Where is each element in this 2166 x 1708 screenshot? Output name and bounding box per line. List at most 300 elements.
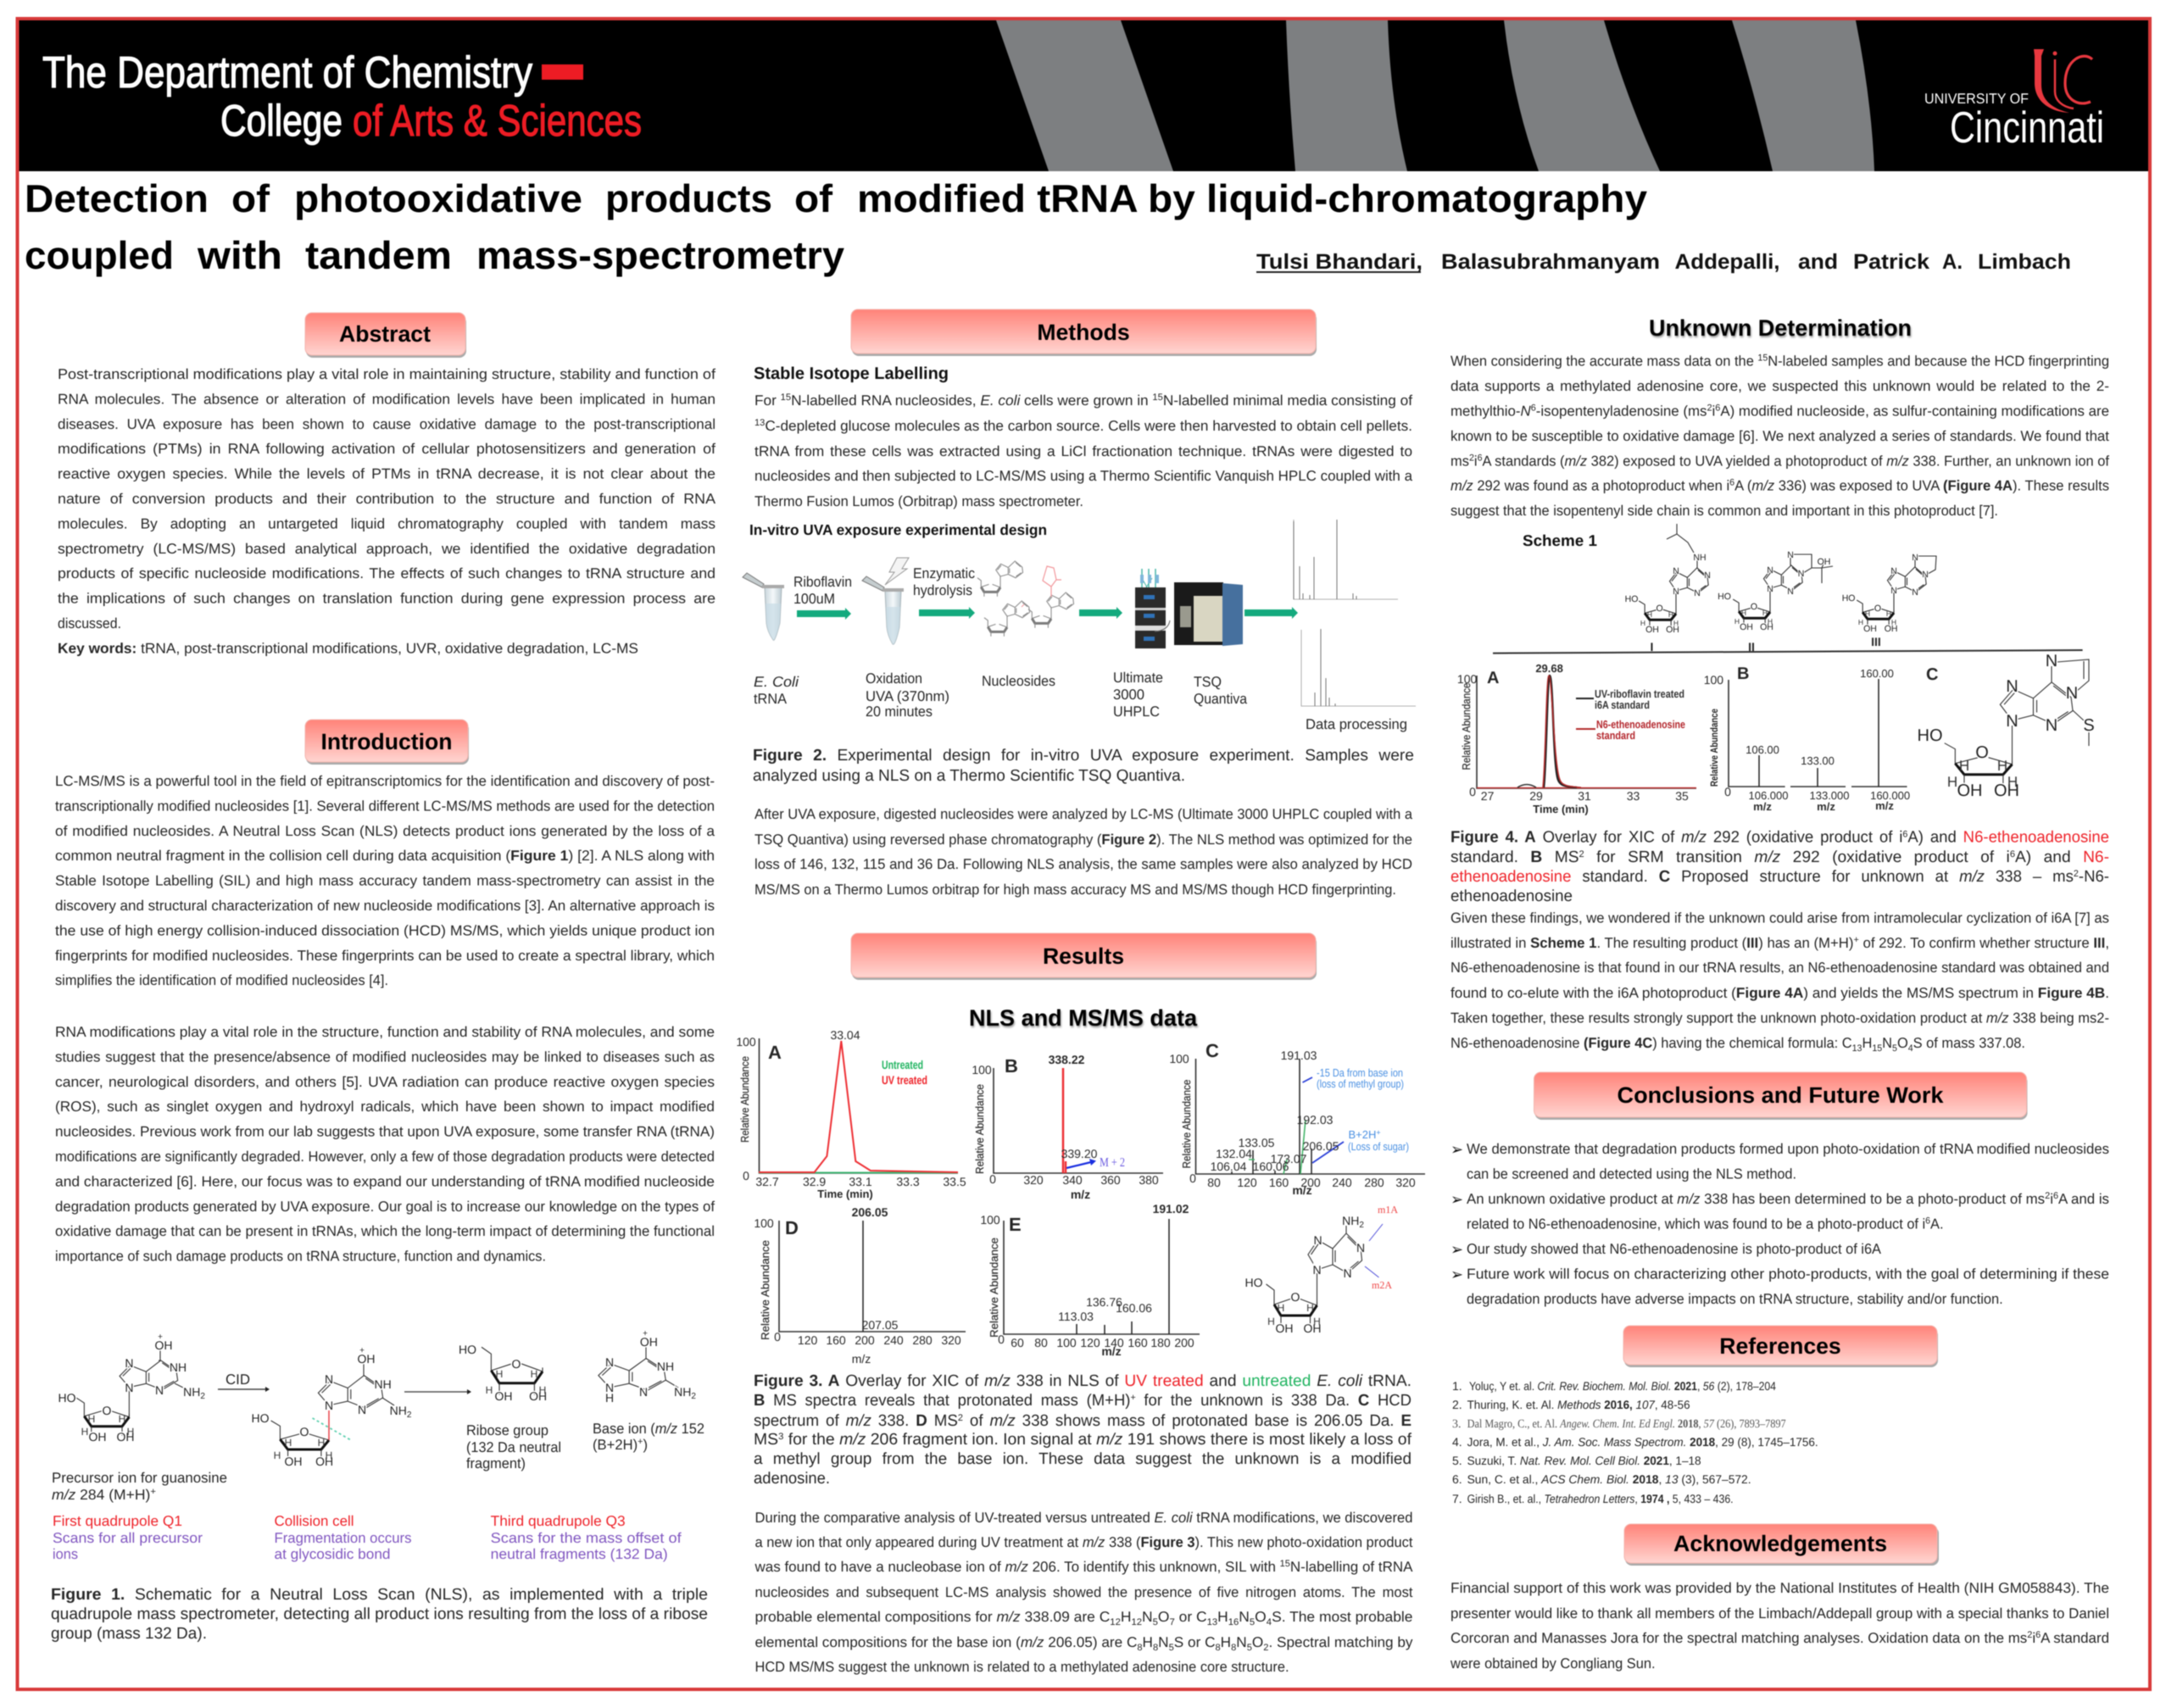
chart: figure 3C HCD spectrum: 133.05 — [1239, 1136, 1275, 1149]
chart: figure 3C HCD spectrum: 120 — [1237, 1176, 1257, 1189]
structure: ribose group — [459, 1343, 547, 1403]
introduction paragraph 1: discovery and structural characterization of new nucleoside modifications [3]. An alternative approach is — [55, 898, 715, 914]
structure: figure 4C proposed structure: N — [2046, 716, 2057, 735]
chart: figure 4A XIC overlay: 27 — [1481, 789, 1495, 803]
fragment labels: Base ion (m/z 152 — [593, 1421, 704, 1437]
arrow: green 4 — [1244, 607, 1298, 619]
fragment labels: Precursor ion for guanosine — [52, 1470, 227, 1486]
scheme 1: structure III: N — [1912, 587, 1918, 598]
panel: abstract — [58, 313, 716, 656]
figure 4 caption: ethenoadenosine standard. C Proposed structure for unknown at m/z 338 – ms2-N6- — [1450, 868, 2109, 886]
results paragraph: was found to have a nucleobase ion of m/z 206. To identify this unknown, SIL with 15N-labelling of tRNA — [754, 1559, 1413, 1575]
results paragraph: a new ion that only appeared during UV treatment at m/z 338 (Figure 3). This new photo-oxidation product — [754, 1534, 1413, 1550]
figure 2 caption — [753, 747, 1414, 785]
structure: precursor guanosine: OH — [154, 1338, 173, 1352]
quadrupole descriptions: ions — [53, 1546, 78, 1562]
heading: methods: Methods — [1037, 320, 1130, 345]
chart: figure 3D MS2 spectrum: 320 — [941, 1333, 961, 1347]
structure: adenosine with m1A and m2A sites: 2 — [1359, 1221, 1364, 1230]
structure: adenosine with m1A and m2A sites: N — [1312, 1263, 1322, 1277]
chart: figure 4A XIC overlay: 0 — [1469, 785, 1476, 798]
conclusion bullets — [1450, 1141, 2109, 1307]
quadrupole descriptions: Third quadrupole Q3 — [491, 1513, 626, 1529]
reference list: 4. — [1452, 1435, 1462, 1449]
subheading: in-vitro UVA exposure: In-vitro UVA exposure experimental design — [749, 521, 1047, 538]
structure: precursor guanosine: N — [125, 1356, 133, 1370]
chart: figure 3C HCD spectrum: 320 — [1395, 1176, 1416, 1189]
title: mass-spectrometry — [476, 233, 844, 277]
chart: figure 3C HCD spectrum: (Loss of sugar) — [1348, 1140, 1409, 1153]
chart: figure 3A XIC overlay: 100 — [736, 1035, 756, 1049]
structure: precursor guanosine: H — [88, 1413, 95, 1425]
chart: figure 4A XIC overlay: 29 — [1529, 789, 1543, 803]
chart: figure 4A XIC overlay: i6A standard — [1595, 698, 1650, 711]
chart: figure 3B MS spectrum: 320 — [1023, 1173, 1044, 1187]
introduction paragraph 2 — [55, 1024, 715, 1265]
title: photooxidative — [294, 176, 582, 220]
authors: Balasubrahmanyam — [1441, 250, 1660, 274]
acknowledgements text: presenter would like to thank all members of the Limbach/Addepall group with a special thanks to Daniel — [1450, 1605, 2109, 1622]
workflow labels: 3000 — [1113, 687, 1144, 703]
structure: figure 4C proposed structure: H — [1997, 758, 2007, 774]
scheme 1: structure I: OH — [1645, 625, 1659, 635]
chart: figure 3C HCD spectrum: 160.06 — [1253, 1160, 1289, 1173]
chart: figure 3D MS2 spectrum: 280 — [912, 1333, 933, 1347]
structure: base ion: N — [605, 1355, 614, 1369]
label: enzymatic hydrolysis — [913, 565, 975, 598]
workflow labels: Nucleosides — [982, 673, 1055, 689]
results paragraph: probable elemental compositions for m/z 338.09 are C12H12N5O7 or C13H16N5O4S. The most probable — [754, 1609, 1412, 1627]
chart: figure 4B SRM spectrum — [1704, 665, 1910, 813]
authors: Addepalli, — [1675, 250, 1780, 274]
structure: adenosine with m1A and m2A sites: N — [1313, 1233, 1322, 1247]
stable isotope labelling text: tRNA from these cells was extracted using a LiCl fractionation technique. tRNAs were digested to — [754, 443, 1412, 459]
scheme 1: structure III: III — [1871, 635, 1881, 648]
structure: collision cell fragmentation: OH — [285, 1455, 302, 1468]
heading: conclusions: Conclusions and Future Work — [1618, 1082, 1944, 1108]
abstract text: nature of conversion products and their contribution to the structure and function of RNA — [58, 491, 716, 507]
structure: collision cell fragmentation: N — [325, 1372, 333, 1386]
chart: figure 4A XIC overlay: 31 — [1578, 789, 1591, 803]
structure: precursor guanosine: H — [119, 1413, 125, 1425]
quadrupole descriptions: Fragmentation occurs — [275, 1530, 412, 1546]
fragment labels: Ribose group — [466, 1422, 548, 1438]
title: with — [197, 233, 282, 277]
chart: figure 3C HCD spectrum: 240 — [1332, 1176, 1352, 1189]
structure: precursor guanosine: NH — [183, 1385, 200, 1399]
arrow: CID — [218, 1371, 270, 1392]
arrow: green 1 — [797, 608, 851, 620]
title: of — [794, 176, 833, 220]
chart: data spectrum top — [1294, 520, 1398, 599]
abstract text: Key words: tRNA, post-transcriptional modifications, UVR, oxidative degradation, LC-MS — [58, 640, 638, 656]
heading: acknowledgements: Acknowledgements — [1673, 1531, 1887, 1556]
arrow: green 2 — [919, 607, 975, 619]
structure: figure 4C proposed structure: N — [2046, 652, 2057, 670]
structure: adenosine with m1A and m2A sites — [1244, 1204, 1398, 1335]
unknown determination continued text: illustrated in Scheme 1. The resulting product (III) has an (M+H)+ of 292. To confirm whether structure III, — [1450, 935, 2109, 951]
structure: precursor guanosine: N — [125, 1381, 133, 1394]
structure: adenosine with m1A and m2A sites: N — [1356, 1241, 1365, 1255]
structure: base ion: H — [605, 1391, 614, 1405]
chart: figure 3C HCD spectrum: C — [1205, 1040, 1219, 1061]
chart: figure 3B MS spectrum: m/z — [1071, 1188, 1090, 1201]
chart: figure 4B SRM spectrum: 106.00 — [1746, 743, 1779, 756]
heading: acknowledgements — [1624, 1524, 1939, 1566]
structure: precursor guanosine: N — [155, 1383, 164, 1397]
scheme 1: structure III: H — [1858, 618, 1863, 626]
conclusion bullets: Our study showed that N6-ethenoadenosine is photo-product of i6A — [1467, 1241, 1882, 1257]
results paragraph — [754, 1510, 1413, 1675]
chart: figure 3A XIC overlay: 33.04 — [830, 1028, 860, 1042]
structure: ribose group: H — [531, 1368, 537, 1380]
chart: figure 3E MS3 spectrum: 100 — [1056, 1336, 1077, 1349]
chart: figure 3E MS3 spectrum: 100 — [980, 1213, 1000, 1227]
introduction paragraph 2: studies suggest that the presence/absence of modified nucleosides may be linked to diseases such as — [55, 1049, 715, 1065]
chart: figure 3B MS spectrum — [972, 1053, 1163, 1201]
chart: figure 3C HCD spectrum: 100 — [1169, 1052, 1189, 1065]
unknown determination text — [1450, 353, 2109, 519]
chart: figure 4A XIC overlay: A — [1487, 669, 1499, 687]
department name: The Department of Chemistry — [42, 48, 532, 97]
scheme 1: structure I: N — [1673, 566, 1679, 576]
scheme 1: structure I: H — [1640, 619, 1645, 627]
results paragraph: nucleosides and subsequent LC-MS analysis showed the presence of five nitrogen atoms. The most — [754, 1584, 1413, 1600]
structure: adenosine with m1A and m2A sites: m2A — [1372, 1279, 1392, 1291]
introduction paragraph 1: simplifies the identification of modified nucleosides [4]. — [55, 972, 388, 988]
scheme 1: structure III: H — [1891, 618, 1896, 626]
chart: figure 3A XIC overlay: 32.7 — [755, 1175, 779, 1188]
scheme 1: structure III: OH — [1885, 624, 1897, 634]
chart: figure 4A XIC overlay: N6-ethenoadenosine — [1596, 718, 1685, 731]
unknown determination text: m/z 292 was found as a photoproduct when i6A (m/z 336) was exposed to UVA (Figure 4A). These results — [1450, 477, 2109, 493]
conclusion bullets: ➢ — [1450, 1266, 1463, 1284]
scheme 1: structure I: H — [1647, 610, 1652, 619]
chart: figure 3D MS2 spectrum: 160 — [826, 1333, 846, 1347]
chart: figure 3E MS3 spectrum: 140 — [1104, 1336, 1124, 1349]
figure 3 caption: a methyl group from the base ion. These data suggest the unknown is a modified — [754, 1450, 1412, 1468]
structure: ribose group: H — [539, 1384, 546, 1396]
structure: base ion: NH — [674, 1385, 691, 1399]
unknown determination text: data supports a methylated adenosine core, we suspected this unknown would be related to the 2- — [1450, 378, 2109, 394]
chart: figure 3D MS2 spectrum: 200 — [855, 1333, 875, 1347]
figure 3 caption: Figure 3. A Overlay for XIC of m/z 338 in NLS of UV treated and untreated E. coli tRNA. — [754, 1372, 1412, 1390]
structure: ribose group: OH — [495, 1389, 512, 1403]
chart: figure 3B MS spectrum: 380 — [1139, 1173, 1159, 1187]
introduction paragraph 1: fingerprints for modified nucleosides. These fingerprints can be used to create a spectral library, which — [55, 948, 715, 964]
panel: conclusions and future work — [1450, 1072, 2109, 1307]
chart: figure 3B MS spectrum: B — [1005, 1055, 1018, 1077]
unknown determination text: methylthio-N6-isopentenyladenosine (ms2i6A) modified nucleoside, as sulfur-containing modifications are — [1450, 403, 2109, 420]
figure 4 caption: standard. B MS2 for SRM transition m/z 292 (oxidative product of i6A) and N6- — [1450, 848, 2109, 866]
scheme 1: structure I: N — [1704, 570, 1711, 581]
scheme 1: structure II: OH — [1760, 622, 1773, 632]
introduction paragraph 2: nucleosides. Previous work from our lab suggests that upon UVA exposure, some transfer RNA (tRNA) — [55, 1124, 715, 1140]
chart: figure 3D MS2 spectrum: m/z — [852, 1352, 871, 1366]
chart: figure 3A XIC overlay: Time (min) — [817, 1188, 873, 1200]
chart: figure 4A XIC overlay: 100 — [1457, 672, 1477, 686]
fragment labels: (B+2H)+) — [593, 1437, 648, 1453]
structure: base ion: N — [639, 1385, 648, 1399]
scheme 1: structure I: N — [1673, 587, 1679, 597]
methods paragraph: After UVA exposure, digested nucleosides were analyzed by LC-MS (Ultimate 3000 UHPLC coupled with a — [754, 806, 1413, 822]
label: enzymatic hydrolysis: hydrolysis — [913, 582, 972, 598]
abstract text: RNA molecules. The absence or alteration of modification levels have been implicated in human — [58, 391, 716, 407]
results paragraph: HCD MS/MS suggest the unknown is related to a methylated adenosine core structure. — [754, 1659, 1289, 1675]
scheme 1: structure III: O — [1874, 604, 1881, 614]
scheme 1: structure II: N — [1787, 550, 1794, 560]
structure: collision cell fragmentation: H — [274, 1449, 281, 1461]
structure: adenosine with m1A and m2A sites: HO — [1244, 1276, 1263, 1289]
unknown determination continued text: Given these findings, we wondered if the unknown could arise from intramolecular cyclization of i6A [7] as — [1450, 910, 2109, 926]
chart: figure 3B MS spectrum: Relative Abundance — [973, 1084, 986, 1174]
unknown determination continued text: Taken together, these results strongly support the unknown photo-oxidation product at m/z 338 being ms2- — [1450, 1010, 2109, 1026]
scheme 1 label: Scheme 1 — [1523, 531, 1597, 549]
scheme 1: structure III: N — [1890, 586, 1897, 596]
workflow labels: 20 minutes — [866, 704, 933, 720]
chart: figure 3A XIC overlay: UV treated — [882, 1073, 927, 1087]
abstract text: modifications (PTMs) in RNA following activation of cellular photosensitizers and generation of — [58, 441, 716, 457]
icon: HPLC stack — [1135, 569, 1166, 648]
structure: adenosine with m1A and m2A sites: H — [1278, 1302, 1284, 1314]
structure: precursor guanosine: H — [127, 1426, 134, 1438]
figure 1 caption: group (mass 132 Da). — [51, 1625, 207, 1643]
abstract text: molecules. By adopting an untargeted liquid chromatography coupled with tandem mass — [58, 515, 716, 531]
stable isotope labelling text: For 15N-labelled RNA nucleosides, E. coli cells were grown in 15N-labelled minimal media consisting of — [754, 392, 1412, 409]
structure: collision cell fragmentation: OH — [315, 1455, 333, 1468]
panel: unknown determination — [1450, 315, 2109, 1054]
scheme 1: structure III: HO — [1842, 593, 1855, 604]
chart: figure 4B SRM spectrum: 133.00 — [1801, 754, 1835, 767]
chart: figure 3D MS2 spectrum: 100 — [754, 1216, 774, 1230]
heading: abstract — [305, 313, 466, 358]
scheme 1: structure III — [1842, 553, 1936, 648]
scheme 1: structure II: H — [1762, 609, 1768, 617]
department name: College — [220, 97, 342, 146]
reference list: Sun, C. et al., ACS Chem. Biol. 2018, 13 (3), 567–572. — [1467, 1472, 1751, 1486]
fragment labels — [52, 1421, 704, 1503]
chart: figure 3B MS spectrum: 340 — [1062, 1173, 1083, 1187]
quadrupole descriptions: Collision cell — [275, 1513, 354, 1529]
structure: figure 4C proposed structure: N — [2006, 712, 2018, 731]
title: products — [605, 176, 772, 220]
reference list: Jora, M. et al., J. Am. Soc. Mass Spectrom. 2018, 29 (8), 1745–1756. — [1467, 1435, 1818, 1449]
structure: precursor guanosine: H — [81, 1426, 88, 1438]
introduction paragraph 2: cancer, neurological disorders, and others [5]. UVA radiation can produce reactive oxygen species — [55, 1074, 715, 1090]
structure: figure 4C proposed structure: C — [1926, 665, 1938, 684]
abstract text — [58, 366, 716, 656]
structure: collision cell fragmentation: NH — [390, 1404, 407, 1417]
chart: figure 3C HCD spectrum: 191.03 — [1281, 1049, 1317, 1062]
figure 1 caption: quadrupole mass spectrometer, detecting all product ions resulting from the loss of a ribose — [51, 1605, 708, 1623]
fragment labels: (132 Da neutral — [466, 1439, 561, 1455]
structure: base ion — [599, 1329, 696, 1405]
structure: collision cell fragmentation: NH — [374, 1377, 392, 1391]
abstract text: discussed. — [58, 615, 121, 631]
stable isotope labelling text — [754, 392, 1413, 509]
scheme 1: structure II: OH — [1740, 622, 1753, 632]
chart: figure 3D MS2 spectrum: 240 — [883, 1333, 904, 1347]
abstract text: products of specific nucleoside modifications. The effects of such changes to tRNA structure and — [58, 565, 716, 581]
introduction paragraph 1 — [55, 773, 716, 988]
scheme 1: structure II: N — [1787, 587, 1794, 597]
chart: figure 4B SRM spectrum: B — [1737, 665, 1749, 683]
chart: figure 4B SRM spectrum: 0 — [1724, 785, 1731, 798]
chart: figure 3A XIC overlay: A — [768, 1042, 782, 1063]
introduction paragraph 2: RNA modifications play a vital role in the structure, function and stability of RNA molecules, and some — [55, 1024, 715, 1040]
chart: figure 4B SRM spectrum: 133.000 — [1809, 789, 1850, 802]
heading: methods — [851, 309, 1317, 356]
conclusion bullets: related to N6-ethenoadenosine, which was found to be a photo-product of i6A. — [1467, 1216, 1943, 1232]
conclusion bullets: Future work will focus on characterizing other photo-products, with the goal of determining if these — [1467, 1266, 2109, 1282]
scheme 1: structure II: H — [1768, 617, 1773, 626]
subheading: stable isotope labelling: Stable Isotope Labelling — [754, 364, 949, 383]
scheme 1: structure II: O — [1751, 602, 1757, 612]
stable isotope labelling text: 13C-depleted glucose molecules as the carbon source. Cells were then harvested to obtain cell pellets. — [754, 418, 1412, 434]
chart: figure 3E MS3 spectrum: 191.02 — [1153, 1202, 1189, 1216]
conclusion bullets: ➢ — [1450, 1191, 1463, 1209]
reference list: 6. — [1452, 1472, 1462, 1486]
chart: figure 3D MS2 spectrum: 0 — [774, 1330, 781, 1344]
chart: figure 3C HCD spectrum: 206.05 — [1303, 1139, 1339, 1153]
university of cincinnati logo: Cincinnati — [1950, 103, 2104, 153]
panel: results — [736, 933, 1425, 1675]
structure: figure 4C proposed structure: OH — [1994, 782, 2019, 800]
heading: results — [851, 933, 1317, 980]
introduction paragraph 2: oxidative damage that can be present in tRNAs, which the long-term impact of determining the functional — [55, 1223, 715, 1239]
quadrupole descriptions — [53, 1513, 682, 1562]
structure: figure 4C proposed structure: H — [1959, 758, 1969, 774]
title — [25, 176, 1647, 277]
structure: precursor guanosine: NH — [170, 1360, 187, 1374]
introduction paragraph 2: modifications are significantly degraded. However, only a few of those degradation products were detected — [55, 1149, 715, 1165]
chart: figure 3C HCD spectrum — [1169, 1040, 1425, 1197]
structure: adenosine with m1A and m2A sites: OH — [1304, 1321, 1321, 1335]
chart: figure 3B MS spectrum: 339.20 — [1061, 1147, 1098, 1160]
chart: figure 4A XIC overlay: Time (min) — [1533, 803, 1589, 815]
arrow: CID: CID — [226, 1371, 250, 1388]
workflow labels: Oxidation — [866, 670, 922, 687]
abstract text: reactive oxygen species. While the levels of PTMs in tRNA decrease, it is not clear about the — [58, 466, 716, 482]
unknown determination text: suggest that the isopentenyl side chain is common and important in this photoproduct [7]. — [1450, 503, 1998, 519]
structure: precursor guanosine — [58, 1332, 205, 1444]
workflow labels: tRNA — [754, 691, 788, 707]
unknown determination text: known to be susceptible to oxidative damage [6]. We next analyzed a series of standards. We found that — [1450, 428, 2109, 444]
structure: adenosine with m1A and m2A sites: OH — [1275, 1321, 1294, 1335]
unknown determination continued text: found to co-elute with the i6A photoproduct (Figure 4A) and yields the MS/MS spectrum in Figure 4B. — [1450, 985, 2109, 1001]
structure: figure 4C proposed structure: H — [1947, 774, 1957, 790]
structure: adenosine with m1A and m2A sites: m1A — [1378, 1204, 1398, 1216]
structure: collision cell fragmentation: H — [326, 1449, 332, 1461]
reference list: 1. — [1452, 1379, 1462, 1393]
structure: figure 4C proposed structure: HO — [1918, 726, 1943, 745]
chart: figure 3E MS3 spectrum: 180 — [1150, 1336, 1171, 1349]
chart: figure 3E MS3 spectrum: m/z — [1101, 1344, 1122, 1358]
results paragraph: During the comparative analysis of UV-treated versus untreated E. coli tRNA modifications, we discovered — [754, 1510, 1412, 1526]
structure: precursor guanosine: + — [158, 1332, 163, 1342]
scheme 1: structure II: OH — [1818, 557, 1830, 567]
scheme 1: structure I: O — [1657, 604, 1663, 614]
chart: figure 3E MS3 spectrum: 80 — [1034, 1336, 1048, 1349]
chart: figure 3C HCD spectrum: 80 — [1207, 1176, 1221, 1189]
chart: figure 3E MS3 spectrum: 200 — [1174, 1336, 1194, 1349]
chart: figure 3A XIC overlay: 32.9 — [803, 1175, 826, 1188]
panel: methods — [743, 309, 1416, 898]
chart: figure 3E MS3 spectrum: 160.06 — [1116, 1301, 1152, 1315]
abstract text: the implications of such changes on translation function during gene expression process are — [58, 591, 716, 607]
chart: figure 4A XIC overlay: 29.68 — [1535, 662, 1563, 675]
acknowledgements text: Corcoran and Manasses Jora for the spectral matching analyses. Oxidation data on the ms2i6A standard — [1450, 1630, 2109, 1646]
chart: figure 3E MS3 spectrum: E — [1009, 1214, 1022, 1235]
structure: figure 4C proposed structure: N — [2006, 677, 2018, 696]
chart: figure 3C HCD spectrum: 132.04 — [1216, 1147, 1252, 1160]
scheme 1: structure II: H — [1741, 609, 1746, 617]
authors: Limbach — [1978, 250, 2071, 274]
figure 1 caption — [51, 1586, 708, 1643]
methods paragraph: TSQ Quantiva) using reversed phase chromatography (Figure 2). The NLS method was optimized for the — [754, 832, 1412, 848]
heading: introduction — [305, 720, 469, 765]
structure: figure 4C proposed structure: N — [2066, 684, 2078, 703]
conclusion bullets: degradation products have adverse impacts on tRNA structure, stability and/or function. — [1467, 1291, 2003, 1307]
header banner — [18, 19, 2150, 171]
label: riboflavin — [793, 574, 852, 607]
workflow labels: Data processing — [1306, 716, 1407, 732]
abstract text: Post-transcriptional modifications play a vital role in maintaining structure, stability and function of — [58, 366, 716, 382]
structure: figure 4C proposed structure — [1918, 652, 2095, 800]
abstract text: diseases. UVA exposure has been shown to cause oxidative damage to the post-transcriptional — [58, 416, 716, 432]
structure: adenosine with m1A and m2A sites: O — [1291, 1290, 1300, 1304]
arrow: green 3 — [1079, 607, 1122, 619]
figure 3 caption — [754, 1372, 1412, 1488]
structure: adenosine with m1A and m2A sites: H — [1313, 1316, 1321, 1327]
reference list: 5. — [1452, 1454, 1462, 1467]
chart: figure 4A XIC overlay — [1457, 662, 1696, 815]
chart: figure 3C HCD spectrum: (loss of methyl group) — [1317, 1077, 1404, 1090]
chart: figure 3C HCD spectrum: -15 Da from base ion — [1317, 1066, 1403, 1079]
structure: collision cell fragmentation: N — [358, 1403, 366, 1416]
chart: figure 4A XIC overlay: standard — [1596, 729, 1635, 742]
conclusion bullets: ➢ — [1450, 1241, 1463, 1259]
figure 3 caption: spectrum of m/z 338. D MS2 of m/z 338 shows mass of protonated base is 206.05 Da. E — [754, 1412, 1412, 1430]
chart: figure 3A XIC overlay: 33.3 — [896, 1175, 920, 1188]
scheme 1: structure II: N — [1767, 584, 1773, 594]
methods paragraph — [754, 806, 1413, 898]
introduction paragraph 1: common neutral fragment in the collision cell during data acquisition ( Figure 1) [2]. A NLS along with — [55, 848, 715, 864]
university of cincinnati logo — [1924, 49, 2104, 153]
structure: adenosine with m1A and m2A sites: H — [1267, 1316, 1275, 1327]
quadrupole descriptions: Scans for all precursor — [53, 1530, 203, 1546]
quadrupole descriptions: First quadrupole Q1 — [53, 1513, 182, 1529]
authors: and — [1798, 250, 1838, 274]
scheme 1: structure III: OH — [1863, 624, 1877, 634]
chart: figure 4B SRM spectrum: 106.000 — [1748, 789, 1789, 802]
workflow labels: Quantiva — [1194, 691, 1248, 707]
chart: figure 4A XIC overlay: Relative Abundance — [1460, 683, 1473, 770]
conclusion bullets: can be screened and detected using the NLS method. — [1467, 1166, 1796, 1182]
authors: A. — [1942, 250, 1963, 274]
authors: Patrick — [1853, 250, 1929, 274]
label: riboflavin: 100uM — [793, 591, 835, 607]
scheme 1: structure III: H — [1886, 609, 1891, 618]
university of cincinnati logo: UNIVERSITY OF — [1924, 91, 2029, 107]
methods paragraph: MS/MS on a Thermo Lumos orbitrap for high mass accuracy MS and MS/MS though HCD fingerprinting. — [754, 882, 1396, 898]
chart: figure 3E MS3 spectrum: 160 — [1128, 1336, 1148, 1349]
chart: figure 3C HCD spectrum: 160 — [1269, 1176, 1289, 1189]
reference list: 3. — [1452, 1418, 1462, 1431]
structure: figure 4C proposed structure: O — [1975, 743, 1989, 762]
workflow labels: E. Coli — [754, 674, 799, 690]
workflow labels — [754, 670, 1407, 732]
